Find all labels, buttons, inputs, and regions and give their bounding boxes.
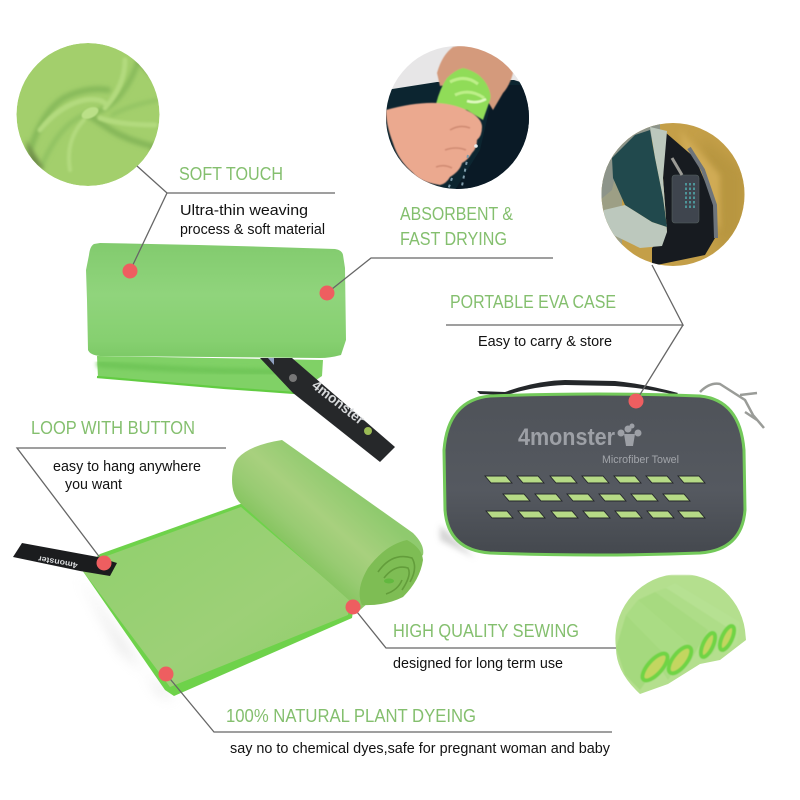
callout: absorbent xyxy=(320,204,553,300)
photo: towel folded edges xyxy=(615,574,746,694)
shadow below towel xyxy=(78,575,175,700)
case subtitle: Microfiber Towel xyxy=(602,454,679,466)
product: EVA case xyxy=(444,380,764,555)
tag: loop with button: 4monster xyxy=(37,554,78,570)
product: rolled towel xyxy=(13,440,423,696)
loop strap xyxy=(260,358,395,462)
callout: natural dyeing: 100% NATURAL PLANT DYEING xyxy=(226,706,476,726)
photo: backpack with case xyxy=(600,122,747,268)
callout: portable case: PORTABLE EVA CASE xyxy=(450,292,616,312)
shadow below case xyxy=(440,525,475,558)
case handle xyxy=(477,380,678,395)
callout: portable case xyxy=(446,265,683,408)
case cord xyxy=(700,384,764,428)
callout: absorbent: ABSORBENT & xyxy=(400,204,513,224)
photo: fabric swirl xyxy=(16,43,160,186)
callout: natural dyeing: say no to chemical dyes,safe for pregnant woman and baby xyxy=(230,741,611,757)
callout: natural dyeing xyxy=(158,666,612,757)
callout: soft touch xyxy=(122,164,335,278)
callout: soft touch: Ultra-thin weaving xyxy=(180,203,308,219)
logo mascot xyxy=(618,424,642,446)
case logo: 4monster xyxy=(518,424,615,451)
callout: high quality sewing: HIGH QUALITY SEWING xyxy=(393,621,579,641)
vent slots xyxy=(485,476,705,518)
callout: loop with button: LOOP WITH BUTTON xyxy=(31,418,195,438)
callout: absorbent: FAST DRYING xyxy=(400,229,507,249)
callout: loop with button xyxy=(17,418,226,570)
photo: hands wringing towel xyxy=(386,45,530,190)
loop strap: 4monster xyxy=(309,377,368,428)
callout: loop with button: you want xyxy=(65,477,122,493)
callout: high quality sewing xyxy=(346,600,616,672)
callout: soft touch: process & soft material xyxy=(180,222,325,238)
callout: portable case: Easy to carry & store xyxy=(478,334,612,350)
callout: loop with button: easy to hang anywhere xyxy=(53,459,201,475)
product: folded towel with loop xyxy=(86,243,395,462)
callout: high quality sewing: designed for long term use xyxy=(393,656,563,672)
tag: loop with button xyxy=(13,543,117,576)
callout: soft touch: SOFT TOUCH xyxy=(179,164,283,184)
